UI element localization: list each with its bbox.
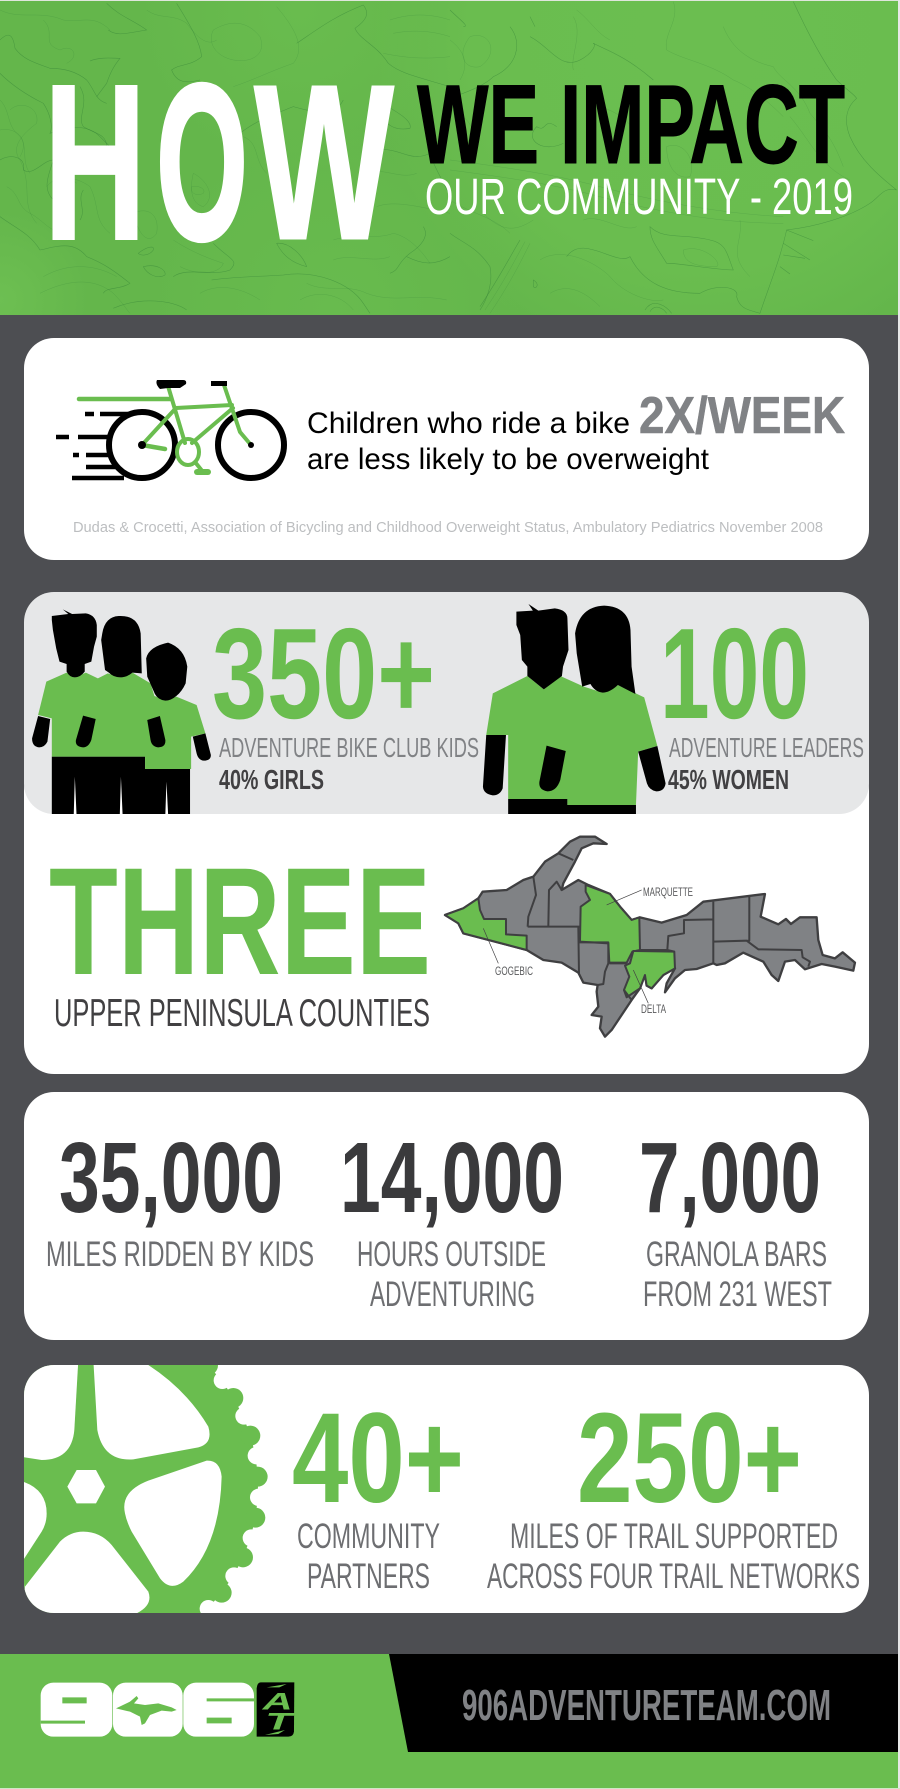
logo: 906 AT: T: [265, 1708, 296, 1735]
title: HOW: W: [254, 38, 394, 286]
source citation: Dudas & Crocetti, Association of Bicycling and Childhood Overweight Status, Ambulatory Pediatrics November 2008: [73, 520, 823, 536]
panel: totals: [24, 1092, 869, 1340]
stat: 14,000: 14,000: [340, 1122, 564, 1234]
title: HOW: O: [156, 38, 248, 286]
map: upper peninsula: [445, 837, 855, 1037]
label: adventure bike club kids: ADVENTURE BIKE CLUB KIDS: [219, 732, 479, 763]
stat: 2X/WEEK: 2X/WEEK: [639, 387, 845, 445]
stat: 40+: 40+: [292, 1387, 464, 1530]
map label: Gogebic: GOGEBIC: [495, 966, 533, 978]
label: 45% women: 45% WOMEN: [668, 764, 789, 795]
icon: two leaders: [483, 604, 666, 814]
icon: three kids: [32, 609, 211, 814]
panel: bike statistic: [24, 338, 869, 560]
stat: 35,000: 35,000: [59, 1122, 283, 1234]
label: hours outside: ADVENTURING: [370, 1275, 535, 1314]
label: miles of trail: [487, 1517, 860, 1596]
label: community partners: [297, 1517, 440, 1596]
label: hours outside: HOURS OUTSIDE: [357, 1235, 546, 1274]
icon: chainring gear: [24, 1365, 268, 1613]
title: HOW: [44, 38, 394, 286]
title: HOW: H: [44, 38, 146, 286]
label: community partners: COMMUNITY: [297, 1517, 440, 1556]
stat: 100: 100: [660, 602, 809, 746]
header panel: [0, 0, 898, 315]
text: less likely overweight: are less likely to be overweight: [307, 443, 709, 476]
label: community partners: PARTNERS: [307, 1557, 430, 1596]
stat: 250+: 250+: [577, 1387, 802, 1530]
icon: speeding bicycle: [56, 380, 284, 478]
logo: 906 AT: A: [261, 1688, 293, 1715]
stat: 7,000: 7,000: [639, 1122, 821, 1234]
label: hours outside: [357, 1235, 546, 1314]
footer black banner: [389, 1654, 898, 1752]
panel: partners and trails: [24, 1365, 869, 1613]
panel: three counties: [24, 760, 869, 1074]
text: children who ride: Children who ride a bike: [307, 407, 630, 440]
stat: THREE: THREE: [49, 836, 431, 1007]
stat: 350+: 350+: [212, 602, 435, 746]
logo: 906 AT: [41, 1682, 296, 1737]
label: upper peninsula counties: UPPER PENINSULA COUNTIES: [54, 992, 430, 1035]
footer: [0, 1654, 900, 1789]
label: granola bars: [643, 1235, 832, 1314]
map label: Delta: DELTA: [641, 1004, 666, 1016]
panel: club kids and leaders: [24, 592, 869, 814]
topographic contour lines: [0, 2, 897, 313]
label: 40% girls: 40% GIRLS: [219, 764, 324, 795]
map label: Marquette: MARQUETTE: [643, 887, 693, 899]
label: miles ridden: MILES RIDDEN BY KIDS: [46, 1235, 314, 1274]
